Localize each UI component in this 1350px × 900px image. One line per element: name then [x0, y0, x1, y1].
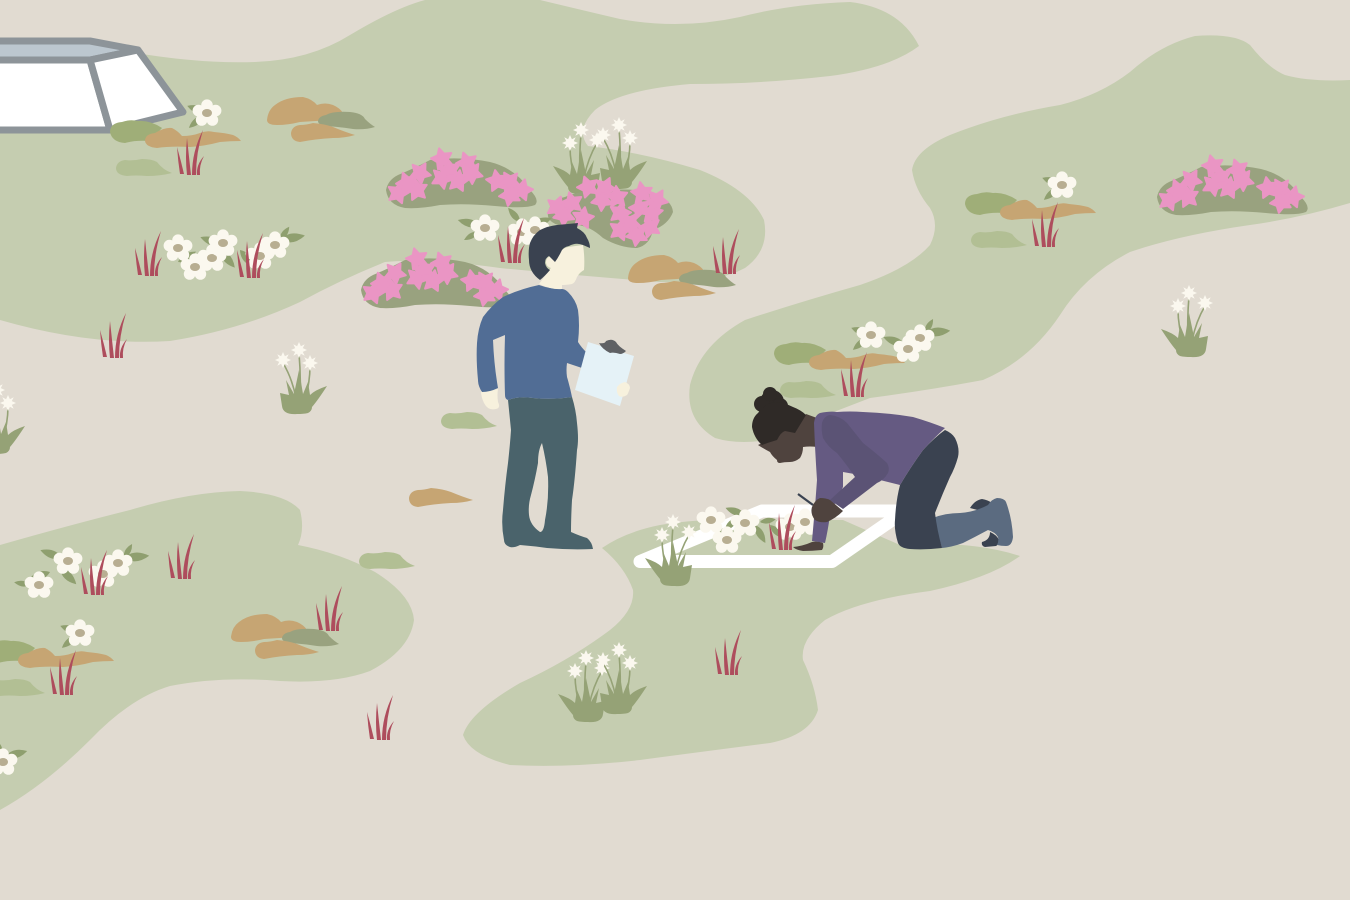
writing hand	[811, 498, 843, 522]
daisy: bottom left edge	[0, 739, 28, 775]
meadow: right	[689, 35, 1350, 442]
sweater	[477, 285, 587, 400]
near boot	[933, 498, 1013, 548]
meadow: top left	[0, 0, 919, 342]
meadow: bottom left	[0, 491, 414, 810]
kneeling surveyor	[752, 387, 1013, 551]
trousers	[502, 397, 593, 549]
daisy clump: right	[882, 318, 951, 362]
hair	[752, 402, 806, 445]
daisy clump behind surveyor	[457, 206, 553, 263]
hair	[529, 223, 590, 280]
ear	[546, 256, 558, 268]
red grass tufts: scattered	[100, 229, 742, 740]
near arm	[822, 415, 889, 509]
white spiky plants: scattered	[0, 285, 1213, 722]
daisy clump: lower left	[14, 543, 150, 598]
white survey quadrat frame	[640, 511, 905, 562]
clipboard clip	[599, 340, 626, 354]
sweater	[812, 412, 945, 543]
head and neck	[539, 245, 584, 289]
neck and face	[758, 414, 817, 463]
daisy clump: upper left	[135, 225, 306, 280]
plants inside quadrat	[645, 505, 819, 586]
white spiky plants: upper cluster	[553, 117, 647, 194]
far boot	[970, 499, 999, 547]
greenhouse window frame	[0, 41, 183, 130]
clipboard	[575, 342, 634, 406]
meadow: bottom centre	[463, 519, 1020, 766]
pink flowering bushes	[361, 146, 1308, 308]
standing surveyor with clipboard	[477, 223, 634, 549]
hair bun	[754, 387, 788, 414]
pencil	[798, 494, 813, 505]
large pink bush	[544, 173, 673, 249]
left hand	[481, 389, 499, 409]
trousers	[895, 430, 959, 549]
right thumb	[617, 382, 630, 397]
plants: mound and flower patches	[0, 97, 1096, 696]
lower hand	[793, 542, 823, 551]
